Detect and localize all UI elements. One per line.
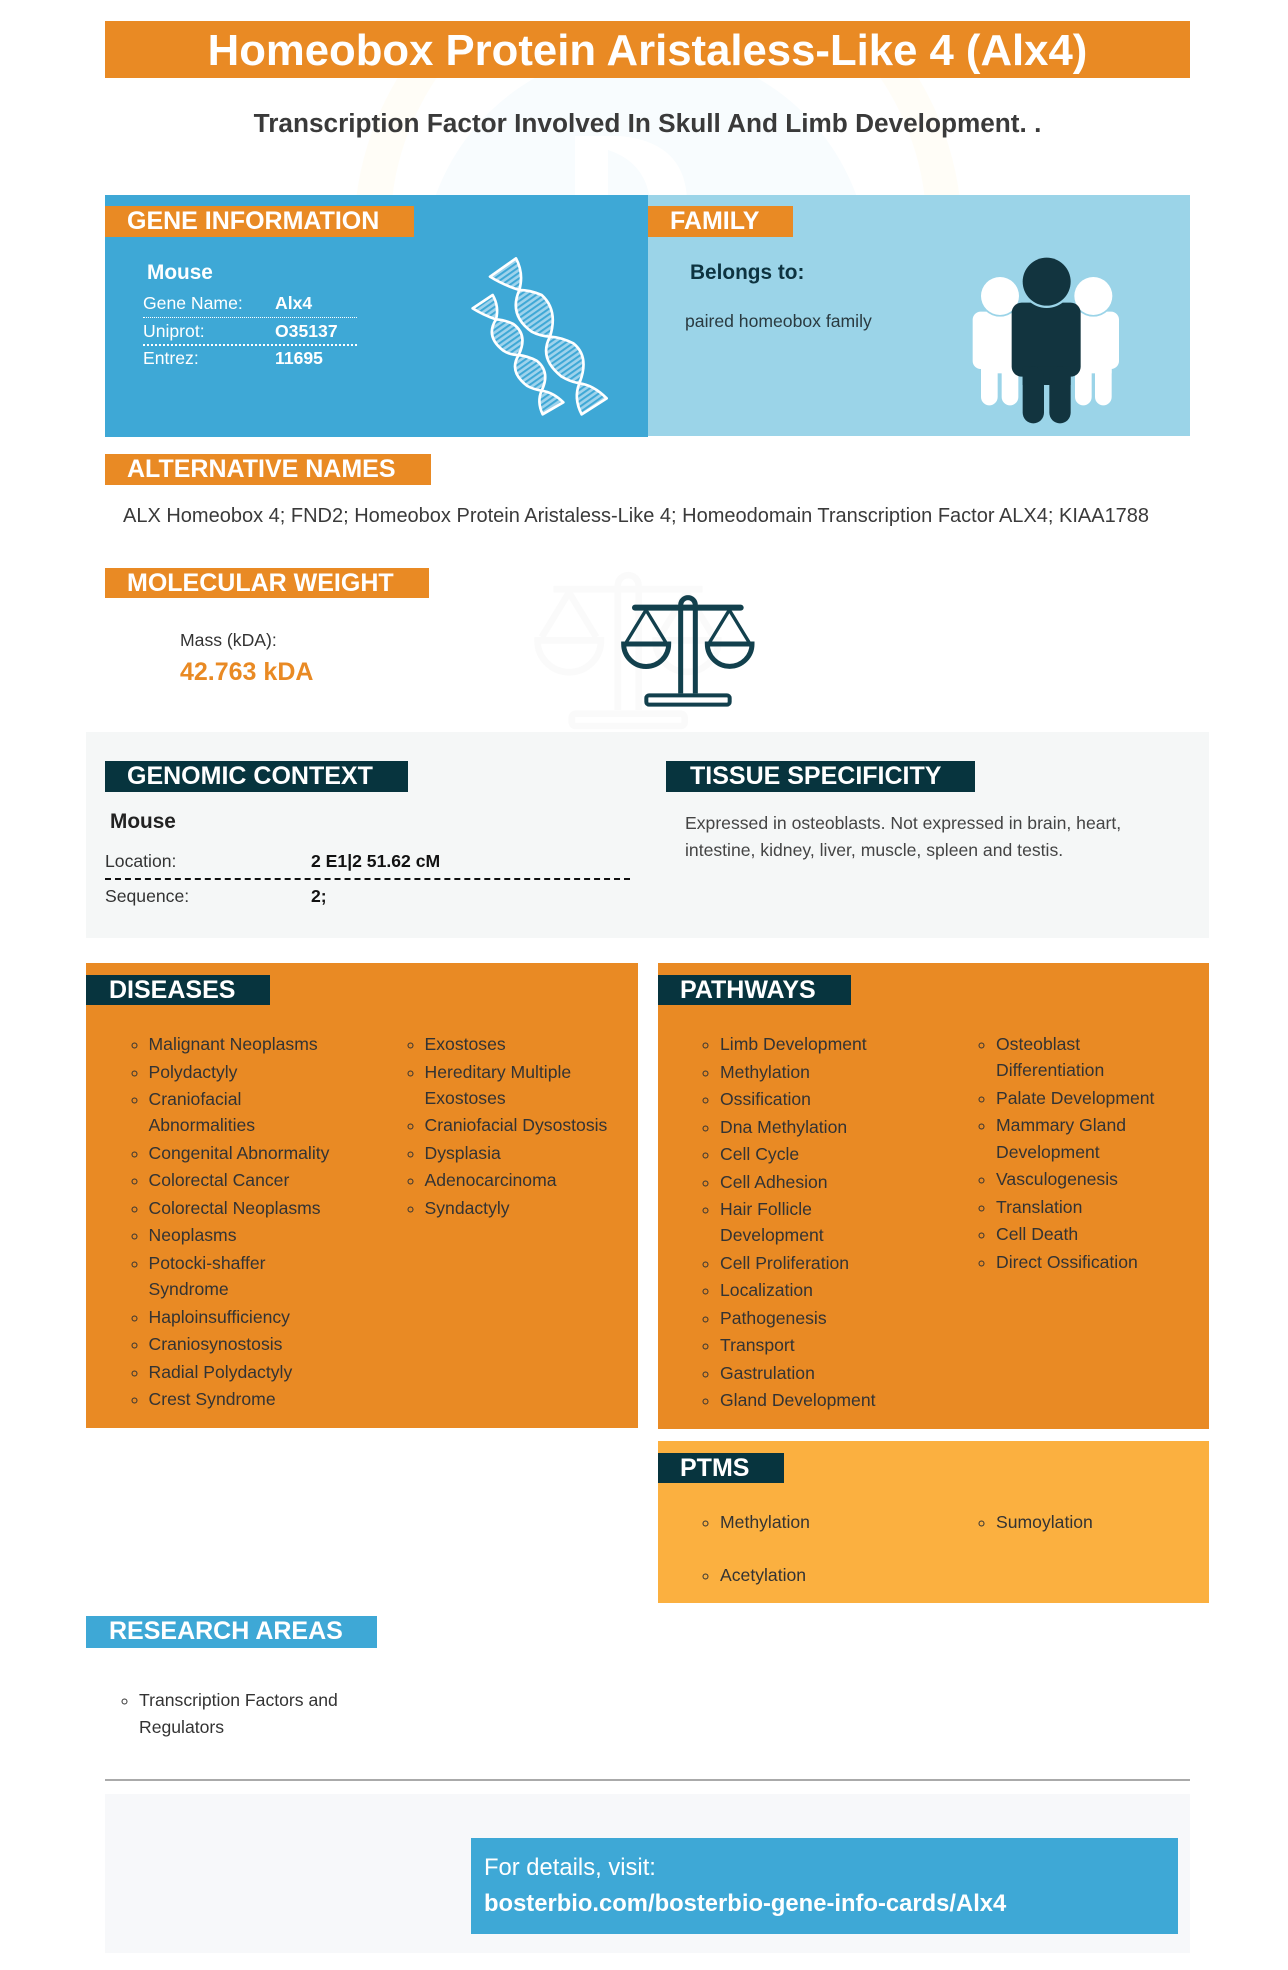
tissue specificity text: intestine, kidney, liver, muscle, spleen and testis.	[685, 840, 1063, 860]
ptms list column 2: Sumoylation	[996, 1512, 1093, 1532]
diseases list column 1: Radial Polydactyly	[148, 1362, 292, 1382]
diseases list column 1: Abnormalities	[148, 1115, 255, 1135]
gene info table: O35137	[275, 321, 338, 341]
panel: pathways	[658, 963, 1209, 1429]
pathways list column 1: Gland Development	[720, 1390, 876, 1410]
row: sequence: Sequence:	[105, 886, 189, 906]
pathways list column 1: Transport	[720, 1335, 795, 1355]
panel: gene information	[105, 195, 648, 437]
gene info table: 11695	[275, 348, 323, 368]
diseases list column 1	[132, 1034, 330, 1409]
diseases list column 1: Craniosynostosis	[148, 1334, 282, 1354]
panel: diseases	[86, 963, 638, 1428]
callout: details link	[471, 1838, 1178, 1934]
heading: pathways: PATHWAYS	[680, 976, 816, 1004]
pathways list column 2: Osteoblast	[996, 1034, 1080, 1054]
pathways list column 1	[702, 1034, 876, 1410]
pathways list column 1: Development	[720, 1225, 824, 1245]
ptms list column 1: Methylation	[720, 1512, 810, 1532]
faint scale watermark	[538, 575, 718, 726]
organism label: Mouse	[147, 261, 213, 284]
icon: dna helices	[471, 257, 608, 416]
panel: genomic context and tissue specificity: 2;	[311, 886, 327, 906]
heading: family: FAMILY	[670, 207, 759, 235]
diseases list column 2: Exostoses	[424, 1088, 506, 1108]
pathways list column 1: Pathogenesis	[720, 1308, 827, 1328]
row: entrez	[143, 348, 323, 368]
research areas list: Transcription Factors and	[139, 1690, 338, 1710]
row: gene name	[143, 293, 312, 313]
pathways list column 2: Development	[996, 1142, 1100, 1162]
panel: ptms	[658, 1441, 1209, 1603]
research areas list	[122, 1690, 338, 1737]
heading: pathways	[658, 975, 851, 1005]
pathways list column 1: Ossification	[720, 1089, 811, 1109]
alternative names text: ALX Homeobox 4; FND2; Homeobox Protein Aristaless-Like 4; Homeodomain Transcription Factor ALX4; KIAA1788	[123, 505, 1149, 527]
row: uniprot	[143, 321, 338, 341]
title banner	[105, 21, 1190, 78]
pathways list column 1: Hair Follicle	[720, 1199, 812, 1219]
heading: tissue specificity: TISSUE SPECIFICITY	[690, 762, 941, 790]
watermark logo	[340, 70, 980, 200]
diseases list column 1: Neoplasms	[148, 1225, 237, 1245]
diseases list column 2: Hereditary Multiple	[424, 1062, 571, 1082]
mass value: 42.763 kDA	[180, 658, 313, 686]
diseases list column 2	[408, 1034, 607, 1218]
family name: paired homeobox family	[685, 311, 872, 331]
title banner: Homeobox Protein Aristaless-Like 4 (Alx4)	[208, 26, 1087, 75]
gene info table	[143, 293, 357, 368]
diseases list column 1: Syndrome	[148, 1279, 229, 1299]
organism label: Mouse	[110, 810, 176, 833]
diseases list column 2: Craniofacial Dysostosis	[424, 1115, 607, 1135]
pathways list column 1: Dna Methylation	[720, 1116, 847, 1136]
diseases list column 1: Colorectal Cancer	[148, 1170, 289, 1190]
heading: molecular weight: MOLECULAR WEIGHT	[127, 569, 394, 597]
diseases list column 1: Congenital Abnormality	[148, 1143, 329, 1163]
ptms list column 1: Acetylation	[720, 1565, 806, 1585]
research areas list: Regulators	[139, 1717, 224, 1737]
row: location: Location:	[105, 851, 176, 871]
pathways list column 1: Cell Adhesion	[720, 1172, 828, 1192]
diseases list column 2: Exostoses	[424, 1034, 506, 1054]
pathways list column 2: Vasculogenesis	[996, 1169, 1118, 1189]
pathways list column 1: Localization	[720, 1280, 813, 1300]
diseases list column 1: Polydactyly	[148, 1062, 237, 1082]
row: uniprot: Uniprot:	[143, 321, 205, 341]
ptms list column 1	[702, 1512, 810, 1585]
heading: ptms	[658, 1453, 784, 1483]
details url: bosterbio.com/bosterbio-gene-info-cards/Alx4	[484, 1890, 1006, 1917]
panel: genomic context and tissue specificity	[86, 732, 1209, 938]
row: location	[105, 851, 440, 871]
diseases list column 1: Crest Syndrome	[148, 1389, 276, 1409]
diseases list column 1: Colorectal Neoplasms	[148, 1198, 321, 1218]
dark scale	[624, 598, 752, 705]
pathways list column 1: Cell Proliferation	[720, 1253, 849, 1273]
belongs to label: Belongs to:	[690, 261, 804, 284]
row: sequence	[105, 886, 327, 906]
subtitle: Transcription Factor Involved In Skull And Limb Development. .	[254, 108, 1041, 138]
diseases list column 2: Dysplasia	[424, 1143, 501, 1163]
panel: family	[648, 195, 1190, 436]
pathways list column 1: Cell Cycle	[720, 1144, 799, 1164]
diseases list column 1: Craniofacial	[148, 1089, 241, 1109]
diseases list column 1: Haploinsufficiency	[148, 1307, 290, 1327]
heading: research areas: RESEARCH AREAS	[109, 1617, 343, 1645]
diseases list column 2: Adenocarcinoma	[424, 1170, 557, 1190]
panel: footer	[105, 1794, 1190, 1953]
heading: gene information: GENE INFORMATION	[127, 207, 379, 235]
tissue specificity text: Expressed in osteoblasts. Not expressed in brain, heart,	[685, 813, 1121, 833]
pathways list column 2: Translation	[996, 1197, 1082, 1217]
gene info table: Alx4	[275, 293, 312, 313]
heading: diseases	[86, 975, 270, 1005]
icon: balance scale	[621, 595, 754, 707]
pathways list column 2: Cell Death	[996, 1224, 1078, 1244]
heading: genomic context: GENOMIC CONTEXT	[127, 762, 373, 790]
diseases list column 1: Potocki-shaffer	[148, 1253, 266, 1273]
heading: ptms: PTMS	[680, 1454, 749, 1482]
pathways list column 1: Methylation	[720, 1062, 810, 1082]
heading: family	[648, 206, 793, 237]
pathways list column 1: Limb Development	[720, 1034, 867, 1054]
details label: For details, visit:	[484, 1854, 656, 1881]
pathways list column 2: Palate Development	[996, 1088, 1154, 1108]
pathways list column 2: Mammary Gland	[996, 1115, 1126, 1135]
tissue specificity text	[685, 813, 1121, 860]
pathways list column 1: Gastrulation	[720, 1363, 815, 1383]
row: entrez: Entrez:	[143, 348, 199, 368]
diseases list column 2: Syndactyly	[424, 1198, 510, 1218]
panel: genomic context and tissue specificity: 2 E1|2 51.62 cM	[311, 851, 440, 871]
mass label: Mass (kDA):	[180, 630, 277, 650]
diseases list column 1: Malignant Neoplasms	[148, 1034, 318, 1054]
pathways list column 2: Direct Ossification	[996, 1252, 1138, 1272]
heading: diseases: DISEASES	[109, 976, 235, 1004]
pathways list column 2	[978, 1034, 1154, 1272]
icon: people group	[972, 258, 1119, 424]
pathways list column 2: Differentiation	[996, 1060, 1104, 1080]
row: gene name: Gene Name:	[143, 293, 243, 313]
heading: alternative names: ALTERNATIVE NAMES	[127, 455, 396, 483]
